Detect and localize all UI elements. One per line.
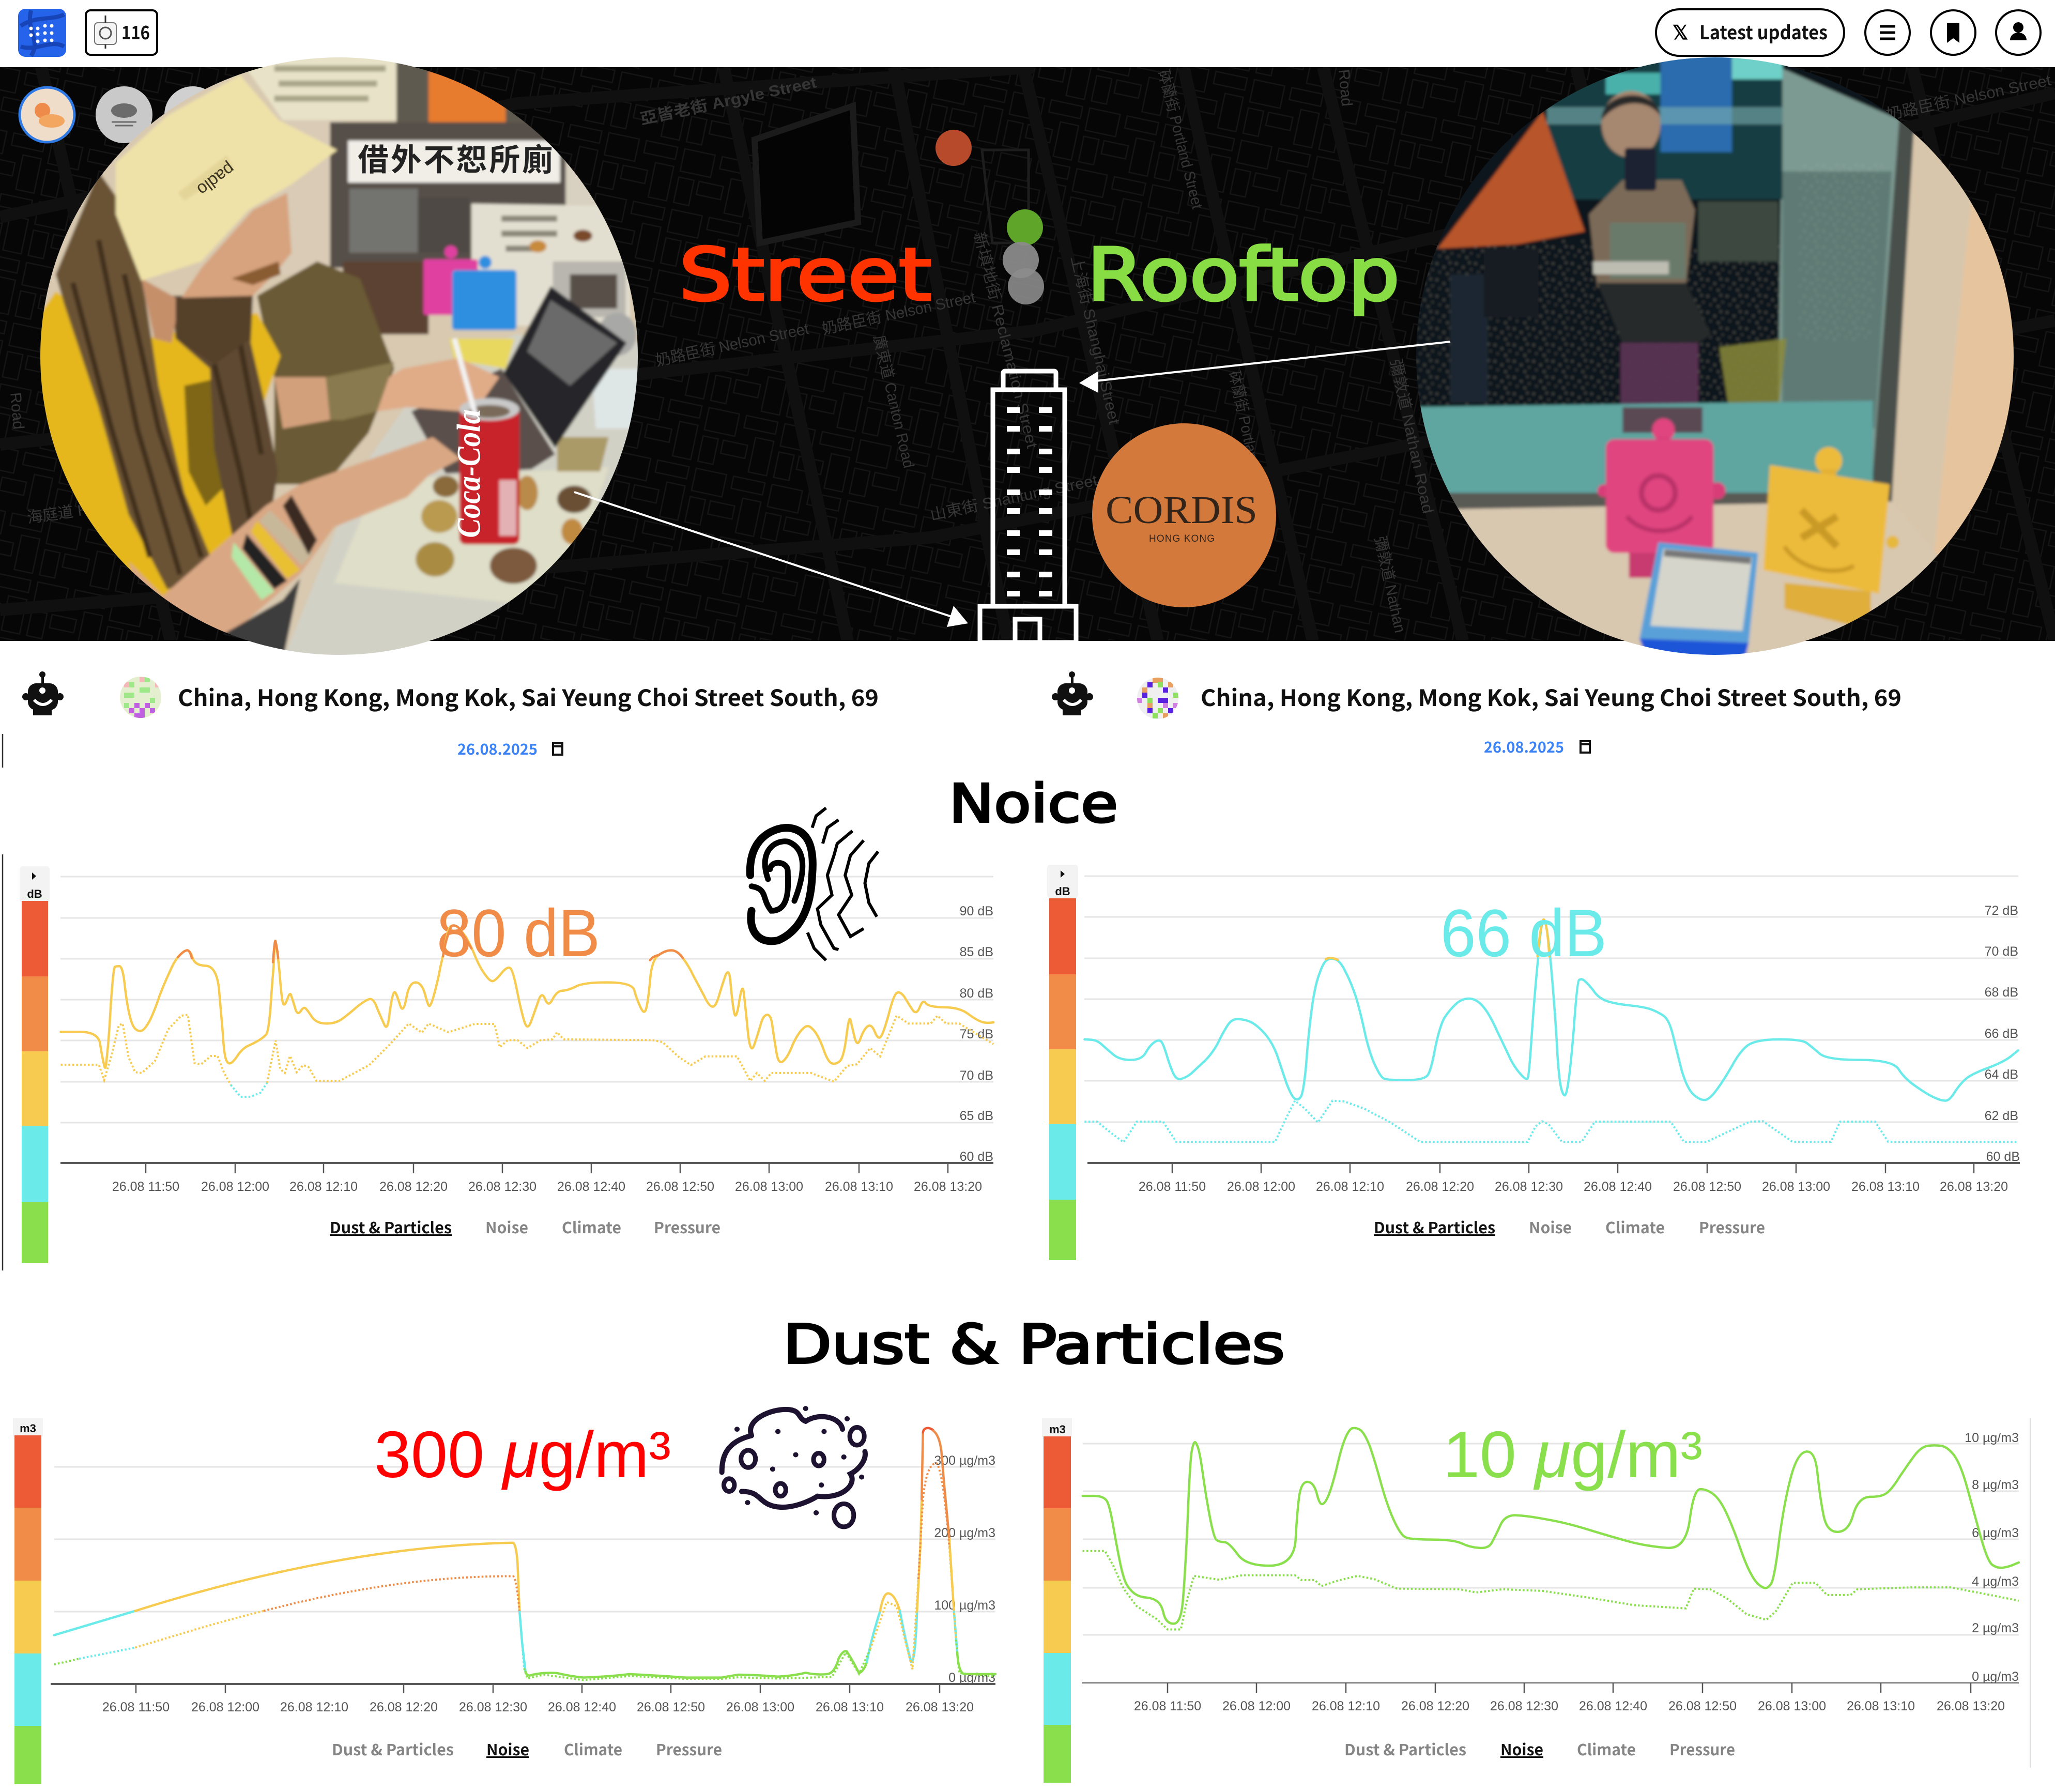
- photo: person with sensor at street cafe: padlo: [193, 159, 238, 199]
- photo: person with sensor at street cafe: 借外不恕所廁: [358, 135, 553, 180]
- x axis: 26.08 13:10: [825, 1180, 893, 1194]
- icon: dust cloud: [722, 1406, 865, 1527]
- tabs: [1374, 1215, 1765, 1238]
- y axis labels: 8 µg/m3: [1972, 1478, 2019, 1492]
- right edge line: [2030, 1418, 2031, 1768]
- colour scale legend: [1042, 1418, 1072, 1783]
- y axis labels: 10 µg/m3: [1965, 1431, 2019, 1445]
- big value: 80 dB: [437, 895, 600, 971]
- tabs: Noise: [485, 1215, 528, 1238]
- counter badge: [86, 10, 157, 55]
- x axis: 26.08 11:50: [102, 1700, 170, 1714]
- panel: map hero background: Road: [1335, 69, 1355, 107]
- x axis: 26.08 11:50: [1139, 1180, 1206, 1194]
- x axis: 26.08 12:10: [280, 1700, 348, 1714]
- photo: person with sensor at street cafe: [26, 47, 660, 664]
- y axis labels: [1965, 1431, 2019, 1684]
- panel: map hero background: 奶路臣街 Nelson Street: [654, 320, 810, 370]
- y axis labels: 0 µg/m3: [948, 1671, 995, 1685]
- y axis labels: 68 dB: [1985, 985, 2018, 1000]
- y axis labels: 0 µg/m3: [1972, 1670, 2019, 1684]
- x axis: 26.08 12:40: [548, 1700, 616, 1714]
- x axis: 26.08 13:10: [1847, 1699, 1915, 1713]
- tabs: Noise: [1529, 1215, 1572, 1238]
- weather selector icons: [20, 86, 221, 143]
- tabs: Pressure: [656, 1737, 722, 1760]
- arrow: street photo to building base: [574, 492, 968, 627]
- y axis labels: [934, 1453, 995, 1685]
- tabs: Pressure: [654, 1215, 720, 1238]
- x axis: 26.08 13:10: [816, 1700, 884, 1714]
- grid lines: [54, 1467, 995, 1612]
- station address: China, Hong Kong, Mong Kok, Sai Yeung Choi Street South, 69: [178, 680, 879, 713]
- tabs: Dust & Particles: [1374, 1215, 1495, 1238]
- big value: 10 μg/m³: [1443, 1418, 1703, 1491]
- panel: map hero background: [0, 67, 2055, 641]
- x axis: 26.08 12:10: [289, 1180, 358, 1194]
- station address: China, Hong Kong, Mong Kok, Sai Yeung Choi Street South, 69: [1201, 680, 1901, 713]
- x axis: 26.08 13:10: [1851, 1180, 1920, 1194]
- sidebar edge marks: [2, 734, 3, 1270]
- panel: rooftop dust chart: [1042, 1418, 2019, 1783]
- x axis: 26.08 12:50: [1673, 1180, 1741, 1194]
- panel: map hero background: 砵蘭街 Portland: [1225, 370, 1263, 469]
- heading: rooftop: Rooftop: [1087, 233, 1400, 317]
- panel: map hero background: 海庭道 H: [26, 501, 90, 527]
- button: latest updates: 𝕏: [1673, 22, 1688, 44]
- panel: map hero background: 彌敦道 Nathan Road: [1387, 358, 1436, 515]
- x axis: 26.08 12:20: [1401, 1699, 1469, 1713]
- heading: street: Street: [679, 233, 931, 317]
- logo: Cordis Hong Kong: [1092, 423, 1276, 607]
- dust series: [54, 1428, 995, 1680]
- x axis: 26.08 12:00: [191, 1700, 259, 1714]
- tabs: Pressure: [1699, 1215, 1765, 1238]
- grid lines: [1083, 1444, 2019, 1635]
- x axis: 26.08 12:20: [370, 1700, 438, 1714]
- panel: rooftop noise chart: [1047, 865, 2020, 1260]
- noise series: [1084, 920, 2018, 1142]
- panel: street noise chart: [20, 866, 993, 1263]
- y axis labels: 70 dB: [960, 1068, 993, 1083]
- icon: calendar: [553, 743, 562, 755]
- date: 26.08.2025: [457, 738, 538, 759]
- colour scale legend: m3: [20, 1422, 36, 1435]
- y axis labels: 72 dB: [1985, 903, 2018, 918]
- x axis: [1087, 1163, 2020, 1194]
- tabs: Noise: [486, 1737, 529, 1760]
- x axis: 26.08 12:10: [1316, 1180, 1384, 1194]
- x axis: 26.08 12:20: [1406, 1180, 1474, 1194]
- panel: street station header: [22, 671, 879, 759]
- heading: noise: Noice: [949, 773, 1118, 835]
- x axis: 26.08 11:50: [112, 1180, 179, 1194]
- logo: Cordis Hong Kong: HONG KONG: [1149, 533, 1215, 544]
- y axis labels: 65 dB: [960, 1109, 993, 1123]
- x axis: 26.08 13:00: [1758, 1699, 1826, 1713]
- x axis: 26.08 12:40: [1579, 1699, 1647, 1713]
- panel: map hero background: Road: [7, 392, 27, 430]
- x axis: [1082, 1683, 2019, 1713]
- x axis: 26.08 12:00: [1227, 1180, 1295, 1194]
- y axis labels: 100 µg/m3: [934, 1598, 995, 1613]
- counter badge: 116: [121, 18, 150, 45]
- icon: calendar: [1581, 741, 1590, 753]
- y axis labels: 60 dB: [960, 1150, 993, 1164]
- y axis labels: 66 dB: [1985, 1027, 2018, 1041]
- avatar: station identicon: [120, 677, 161, 718]
- x axis: [51, 1684, 995, 1714]
- colour scale legend: dB: [27, 887, 42, 900]
- x axis: 26.08 12:30: [1490, 1699, 1558, 1713]
- y axis labels: 200 µg/m3: [934, 1526, 995, 1540]
- icon: robot: [1052, 671, 1093, 715]
- x axis: 26.08 12:00: [1222, 1699, 1291, 1713]
- heading: dust and particles: Dust & Particles: [783, 1313, 1285, 1376]
- panel: map hero background: 彌敦道 Nathan: [1371, 535, 1408, 634]
- panel: map hero background: 奶路臣街 Nelson Street: [821, 289, 977, 338]
- tabs: Pressure: [1669, 1737, 1735, 1760]
- tabs: [1344, 1737, 1735, 1760]
- icon: ear with sound waves: [750, 808, 878, 960]
- y axis labels: 64 dB: [1985, 1067, 2018, 1082]
- grid lines: [1084, 876, 2018, 1122]
- date: 26.08.2025: [1484, 736, 1564, 757]
- tabs: [330, 1215, 720, 1238]
- panel: map hero background: 山東街 Shantung Street: [929, 472, 1099, 524]
- dust series: [1083, 1428, 2019, 1629]
- panel: map hero background: 廣東道 Canton Road: [870, 333, 917, 470]
- tabs: Dust & Particles: [330, 1215, 452, 1238]
- noise series: [60, 926, 993, 1097]
- x axis: 26.08 13:00: [1762, 1180, 1830, 1194]
- panel: map hero background: 亞皆老街 Argyle Street: [639, 74, 818, 128]
- x axis: 26.08 12:40: [1584, 1180, 1652, 1194]
- panel: map hero background: 新填地街 Reclamation Street: [970, 231, 1040, 451]
- x axis: 26.08 13:20: [914, 1180, 982, 1194]
- panel: map hero background: 砵蘭街 Portland Street: [1155, 68, 1206, 211]
- panel: rooftop station header: [1052, 671, 1901, 757]
- icon: account button: [1996, 10, 2041, 55]
- button: latest updates: Latest updates: [1699, 17, 1828, 45]
- x axis: 26.08 13:00: [726, 1700, 794, 1714]
- colour scale legend: [20, 866, 50, 1263]
- x axis: 26.08 12:10: [1312, 1699, 1380, 1713]
- x axis: 26.08 12:00: [201, 1180, 269, 1194]
- x axis: 26.08 12:50: [637, 1700, 705, 1714]
- y axis labels: 2 µg/m3: [1972, 1621, 2019, 1635]
- colour scale legend: dB: [1055, 885, 1070, 898]
- panel: top navigation bar: [18, 9, 2041, 57]
- y axis labels: 300 µg/m3: [934, 1453, 995, 1468]
- y axis labels: 60 dB: [1986, 1150, 2020, 1164]
- x axis: [60, 1163, 993, 1194]
- panel: street dust chart: [13, 1418, 995, 1784]
- x axis: 26.08 12:50: [1668, 1699, 1737, 1713]
- tabs: [332, 1737, 722, 1760]
- y axis labels: 4 µg/m3: [1972, 1574, 2019, 1589]
- y axis labels: 80 dB: [960, 986, 993, 1001]
- tabs: Climate: [1577, 1737, 1636, 1760]
- panel: map hero background: 奶路臣街 Nelson Street: [1885, 72, 2053, 124]
- x axis: 26.08 12:20: [379, 1180, 448, 1194]
- tabs: Dust & Particles: [332, 1737, 454, 1760]
- grid lines: [60, 877, 993, 1123]
- y axis labels: [960, 904, 993, 1164]
- x axis: 26.08 12:50: [646, 1180, 714, 1194]
- x axis: 26.08 13:00: [735, 1180, 803, 1194]
- icon: logo: [18, 9, 66, 57]
- x axis: 26.08 13:20: [1937, 1699, 2005, 1713]
- x axis: 26.08 12:30: [459, 1700, 527, 1714]
- icon: bookmark button: [1931, 10, 1975, 55]
- y axis labels: 75 dB: [960, 1027, 993, 1041]
- icon: tower building: [980, 371, 1076, 642]
- big value: 66 dB: [1440, 895, 1607, 971]
- panel: map hero background: 上海街 Shanghai Street: [1067, 254, 1123, 426]
- button: latest updates: [1656, 9, 1844, 56]
- tabs: Dust & Particles: [1344, 1737, 1466, 1760]
- colour scale legend: m3: [1049, 1423, 1066, 1436]
- y axis labels: 62 dB: [1985, 1109, 2018, 1123]
- y axis labels: 70 dB: [1985, 944, 2018, 959]
- photo: sensors on hotel rooftop window: [1416, 57, 2014, 655]
- big value: 300 μg/m³: [374, 1418, 671, 1491]
- colour scale legend: [1047, 865, 1078, 1260]
- icon: menu button: [1865, 10, 1910, 55]
- x axis: 26.08 13:20: [1940, 1180, 2008, 1194]
- tabs: Climate: [564, 1737, 622, 1760]
- avatar: station identicon: [1137, 678, 1178, 719]
- y axis labels: 90 dB: [960, 904, 993, 918]
- markers on map: [936, 130, 1044, 304]
- x axis: 26.08 12:30: [1495, 1180, 1563, 1194]
- tabs: Climate: [562, 1215, 621, 1238]
- x axis: 26.08 12:40: [557, 1180, 625, 1194]
- icon: robot: [22, 671, 64, 715]
- x axis: 26.08 11:50: [1134, 1699, 1201, 1713]
- y axis labels: 6 µg/m3: [1972, 1526, 2019, 1540]
- tabs: Climate: [1605, 1215, 1665, 1238]
- colour scale legend: [13, 1418, 43, 1784]
- x axis: 26.08 13:20: [906, 1700, 974, 1714]
- y axis labels: 85 dB: [960, 945, 993, 959]
- y axis labels: [1985, 903, 2020, 1164]
- photo: person with sensor at street cafe: Coca-Cola: [450, 409, 487, 538]
- arrow: rooftop photo to building top: [1079, 342, 1450, 393]
- x axis: 26.08 12:30: [468, 1180, 536, 1194]
- tabs: Noise: [1500, 1737, 1543, 1760]
- logo: Cordis Hong Kong: CORDIS: [1106, 488, 1257, 532]
